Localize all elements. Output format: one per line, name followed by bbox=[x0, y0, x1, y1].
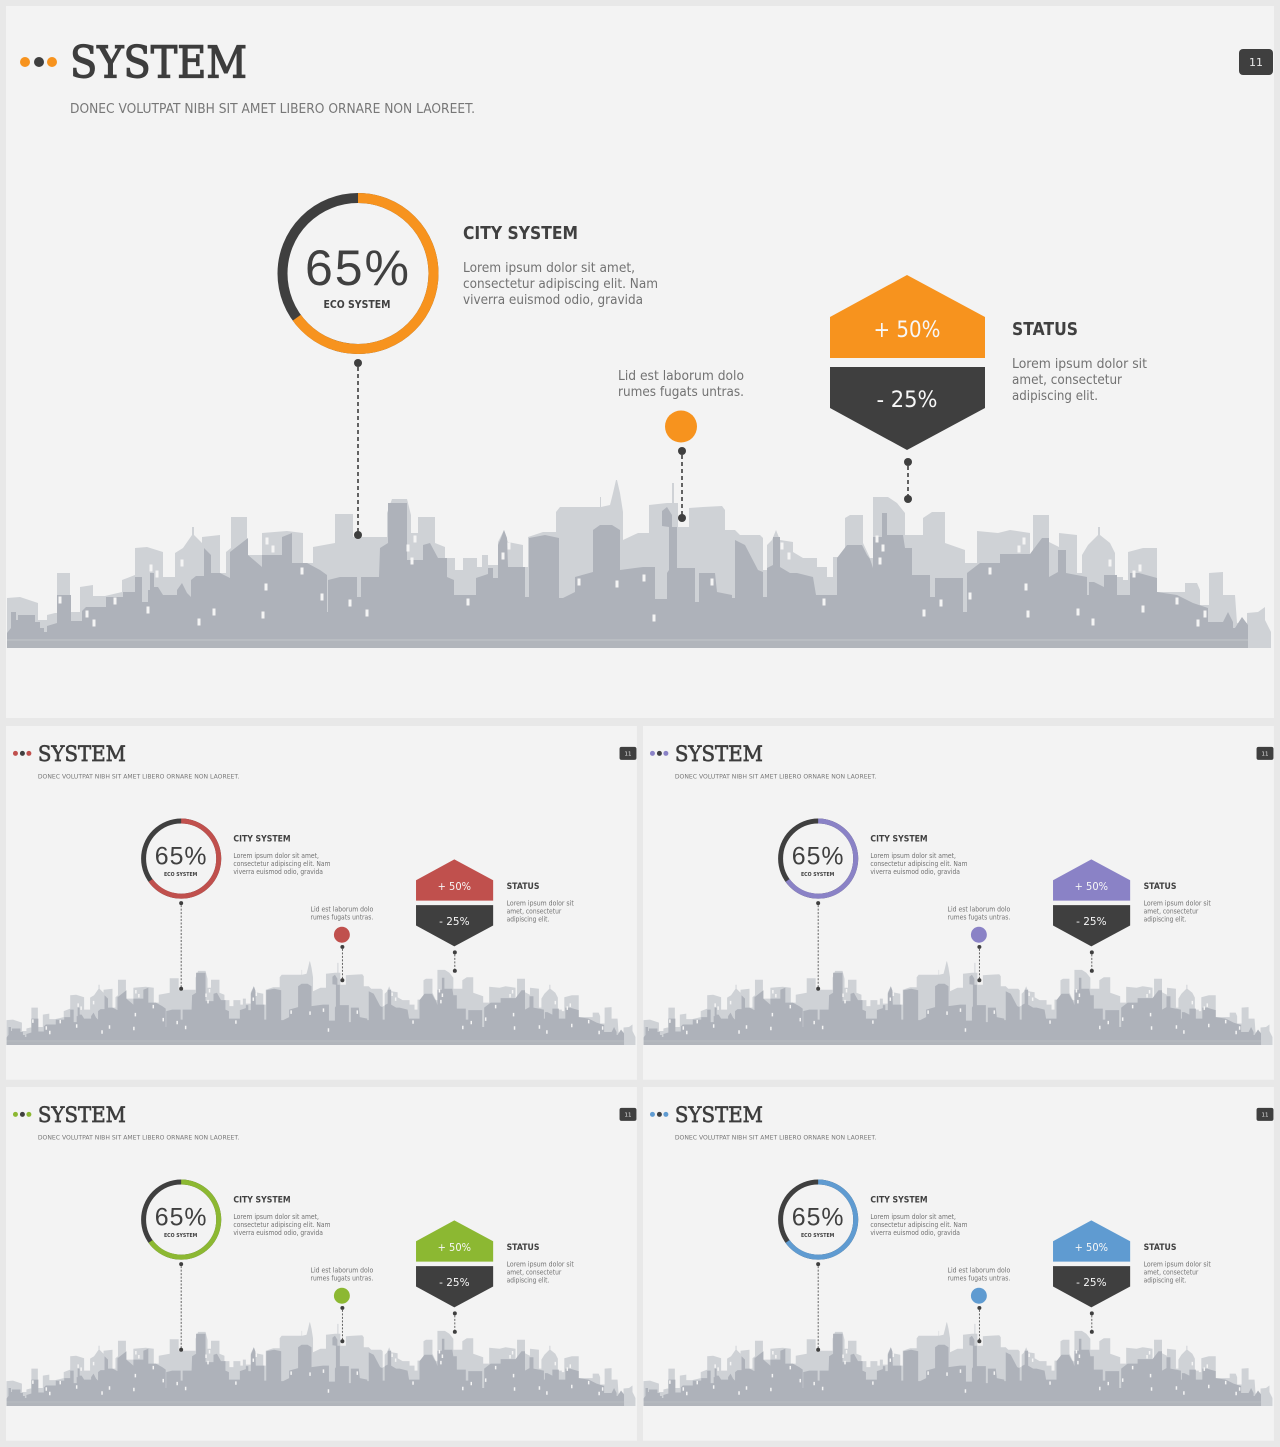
text block: city system: CITY SYSTEM bbox=[233, 834, 291, 844]
text block: status bbox=[1144, 1243, 1211, 1285]
subtitle: DONEC VOLUTPAT NIBH SIT AMET LIBERO ORNARE NON LAOREET. bbox=[675, 773, 876, 781]
page number badge bbox=[620, 747, 636, 760]
title: SYSTEM bbox=[38, 1103, 126, 1128]
subtitle: DONEC VOLUTPAT NIBH SIT AMET LIBERO ORNARE NON LAOREET. bbox=[675, 1134, 876, 1142]
text block: city system bbox=[870, 1195, 967, 1237]
donut chart: 65%: 65% bbox=[155, 842, 207, 870]
city skyline bbox=[643, 961, 1272, 1045]
hexagon: minus 25%: - 25% bbox=[1076, 1276, 1107, 1289]
donut chart: 65% bbox=[144, 821, 219, 896]
text block: callout: rumes fugats untras. bbox=[311, 914, 373, 922]
hexagon: minus 25% bbox=[416, 1266, 493, 1307]
donut chart: 65%: 65% bbox=[792, 842, 844, 870]
page number badge: 11 bbox=[1249, 56, 1263, 69]
connector: hexagon to skyline bbox=[453, 1311, 457, 1334]
icon: title dots bbox=[650, 751, 668, 756]
city skyline bbox=[7, 480, 1271, 648]
panel: large orange slide bbox=[6, 6, 1274, 718]
text block: status bbox=[1144, 882, 1211, 924]
text block: city system: viverra euismod odio, gravida bbox=[870, 1229, 960, 1237]
hexagon: plus 50%: + 50% bbox=[438, 1241, 471, 1254]
text block: status: amet, consectetur bbox=[507, 1269, 562, 1277]
text block: callout: rumes fugats untras. bbox=[618, 384, 744, 400]
icon: title dots bbox=[650, 1112, 668, 1117]
hexagon: minus 25%: - 25% bbox=[439, 1276, 470, 1289]
marker: callout circle with connector bbox=[334, 927, 350, 982]
text block: status: amet, consectetur bbox=[507, 908, 562, 916]
text block: city system: Lorem ipsum dolor sit amet, bbox=[870, 852, 956, 860]
connector: hexagon to skyline bbox=[1090, 950, 1094, 973]
text block: status: amet, consectetur bbox=[1144, 1269, 1199, 1277]
donut chart: 65%: 65% bbox=[792, 1203, 844, 1231]
title: SYSTEM bbox=[38, 742, 126, 767]
page number badge bbox=[1257, 747, 1273, 760]
city skyline bbox=[6, 961, 635, 1045]
text block: city system: Lorem ipsum dolor sit amet, bbox=[233, 1213, 319, 1221]
hexagon: minus 25% bbox=[1053, 1266, 1130, 1307]
page number badge: 11 bbox=[1262, 751, 1268, 757]
page number badge bbox=[1257, 1108, 1273, 1121]
text block: status: Lorem ipsum dolor sit bbox=[507, 900, 574, 908]
text block: city system: viverra euismod odio, gravida bbox=[463, 292, 643, 308]
connector: donut to skyline bbox=[179, 901, 183, 991]
page number badge bbox=[1239, 49, 1273, 75]
connector: donut to skyline bbox=[179, 1262, 183, 1352]
text block: callout: Lid est laborum dolo bbox=[618, 368, 744, 384]
hexagon: plus 50% bbox=[1053, 859, 1130, 901]
city skyline bbox=[6, 1322, 635, 1406]
connector: donut to skyline bbox=[354, 359, 362, 539]
text block: status: adipiscing elit. bbox=[1144, 916, 1186, 924]
text block: status: STATUS bbox=[1012, 319, 1078, 340]
marker: callout circle with connector bbox=[665, 410, 697, 522]
text block: city system: viverra euismod odio, gravida bbox=[870, 868, 960, 876]
hexagon: plus 50% bbox=[1053, 1220, 1130, 1262]
text block: callout bbox=[948, 1267, 1010, 1283]
text block: city system bbox=[463, 223, 658, 308]
connector: hexagon to skyline bbox=[1090, 1311, 1094, 1334]
subtitle: DONEC VOLUTPAT NIBH SIT AMET LIBERO ORNARE NON LAOREET. bbox=[38, 1134, 239, 1142]
donut chart: 65% bbox=[781, 821, 856, 896]
text block: city system: consectetur adipiscing elit. Nam bbox=[870, 860, 967, 868]
text block: callout: Lid est laborum dolo bbox=[948, 1267, 1010, 1275]
text block: city system: consectetur adipiscing elit. Nam bbox=[233, 1221, 330, 1229]
text block: status bbox=[507, 882, 574, 924]
hexagon: minus 25% bbox=[1053, 905, 1130, 946]
text block: status: Lorem ipsum dolor sit bbox=[1144, 900, 1211, 908]
hexagon: plus 50%: + 50% bbox=[874, 318, 940, 343]
text block: callout bbox=[311, 1267, 373, 1283]
text block: status: amet, consectetur bbox=[1144, 908, 1199, 916]
hexagon: minus 25% bbox=[830, 367, 985, 450]
donut chart: 65% bbox=[781, 1182, 856, 1257]
text block: status: STATUS bbox=[507, 882, 539, 892]
text block: city system: Lorem ipsum dolor sit amet, bbox=[870, 1213, 956, 1221]
icon: title dots bbox=[13, 1112, 31, 1117]
page number badge: 11 bbox=[625, 1112, 631, 1118]
text block: city system bbox=[870, 834, 967, 876]
text block: callout: Lid est laborum dolo bbox=[948, 906, 1010, 914]
panel: red slide bbox=[6, 726, 637, 1080]
text block: callout bbox=[311, 906, 373, 922]
text block: city system: CITY SYSTEM bbox=[870, 834, 928, 844]
text block: status: Lorem ipsum dolor sit bbox=[1144, 1261, 1211, 1269]
hexagon: plus 50% bbox=[416, 1220, 493, 1262]
page number badge bbox=[620, 1108, 636, 1121]
donut chart: 65%: 65% bbox=[155, 1203, 207, 1231]
text block: city system: consectetur adipiscing elit. Nam bbox=[463, 276, 658, 292]
title: SYSTEM bbox=[675, 742, 763, 767]
text block: city system: CITY SYSTEM bbox=[870, 1195, 928, 1205]
hexagon: minus 25%: - 25% bbox=[1076, 915, 1107, 928]
text block: callout bbox=[948, 906, 1010, 922]
hexagon: plus 50% bbox=[416, 859, 493, 901]
connector: donut to skyline bbox=[816, 901, 820, 991]
icon: title dots bbox=[13, 751, 31, 756]
text block: status: STATUS bbox=[1144, 882, 1176, 892]
donut chart: 65%: ECO SYSTEM bbox=[801, 1233, 834, 1239]
text block: status: STATUS bbox=[1144, 1243, 1176, 1253]
text block: city system: CITY SYSTEM bbox=[463, 223, 578, 244]
marker: callout circle with connector bbox=[971, 927, 987, 982]
marker: callout circle with connector bbox=[971, 1288, 987, 1343]
donut chart: 65%: ECO SYSTEM bbox=[164, 872, 197, 878]
text block: city system: consectetur adipiscing elit. Nam bbox=[870, 1221, 967, 1229]
hexagon: plus 50% bbox=[830, 275, 985, 358]
connector: hexagon to skyline bbox=[904, 458, 912, 503]
text block: city system bbox=[233, 1195, 330, 1237]
subtitle: DONEC VOLUTPAT NIBH SIT AMET LIBERO ORNARE NON LAOREET. bbox=[38, 773, 239, 781]
donut chart: 65%: ECO SYSTEM bbox=[801, 872, 834, 878]
panel: green slide bbox=[6, 1087, 637, 1441]
hexagon: minus 25%: - 25% bbox=[439, 915, 470, 928]
text block: callout: Lid est laborum dolo bbox=[311, 1267, 373, 1275]
donut chart: 65%: ECO SYSTEM bbox=[324, 299, 390, 311]
text block: city system: CITY SYSTEM bbox=[233, 1195, 291, 1205]
text block: status: adipiscing elit. bbox=[1144, 1277, 1186, 1285]
hexagon: plus 50%: + 50% bbox=[438, 880, 471, 893]
donut chart: 65%: ECO SYSTEM bbox=[164, 1233, 197, 1239]
text block: city system: viverra euismod odio, gravida bbox=[233, 868, 323, 876]
text block: callout: rumes fugats untras. bbox=[311, 1275, 373, 1283]
donut chart: 65%: 65% bbox=[305, 240, 409, 296]
text block: status: adipiscing elit. bbox=[507, 916, 549, 924]
text block: callout: rumes fugats untras. bbox=[948, 1275, 1010, 1283]
text block: status bbox=[1012, 319, 1147, 404]
text block: status: adipiscing elit. bbox=[507, 1277, 549, 1285]
page number badge: 11 bbox=[1262, 1112, 1268, 1118]
donut chart: 65% bbox=[282, 198, 434, 349]
subtitle: DONEC VOLUTPAT NIBH SIT AMET LIBERO ORNARE NON LAOREET. bbox=[70, 102, 475, 117]
text block: callout: Lid est laborum dolo bbox=[311, 906, 373, 914]
title: SYSTEM bbox=[675, 1103, 763, 1128]
text block: city system: Lorem ipsum dolor sit amet, bbox=[463, 260, 635, 276]
hexagon: plus 50%: + 50% bbox=[1075, 880, 1108, 893]
text block: city system: consectetur adipiscing elit. Nam bbox=[233, 860, 330, 868]
text block: callout: rumes fugats untras. bbox=[948, 914, 1010, 922]
panel: blue slide bbox=[643, 1087, 1274, 1441]
connector: donut to skyline bbox=[816, 1262, 820, 1352]
city skyline bbox=[643, 1322, 1272, 1406]
text block: status: amet, consectetur bbox=[1012, 372, 1122, 388]
hexagon: minus 25% bbox=[416, 905, 493, 946]
text block: city system: viverra euismod odio, gravida bbox=[233, 1229, 323, 1237]
marker: callout circle with connector bbox=[334, 1288, 350, 1343]
icon: title dots bbox=[20, 57, 57, 67]
connector: hexagon to skyline bbox=[453, 950, 457, 973]
text block: status: STATUS bbox=[507, 1243, 539, 1253]
text block: status: adipiscing elit. bbox=[1012, 388, 1098, 404]
hexagon: minus 25%: - 25% bbox=[876, 388, 938, 413]
text block: status: Lorem ipsum dolor sit bbox=[1012, 356, 1147, 372]
text block: status bbox=[507, 1243, 574, 1285]
text block: city system bbox=[233, 834, 330, 876]
donut chart: 65% bbox=[144, 1182, 219, 1257]
text block: status: Lorem ipsum dolor sit bbox=[507, 1261, 574, 1269]
text block: callout bbox=[618, 368, 744, 400]
panel: purple slide bbox=[643, 726, 1274, 1080]
hexagon: plus 50%: + 50% bbox=[1075, 1241, 1108, 1254]
text block: city system: Lorem ipsum dolor sit amet, bbox=[233, 852, 319, 860]
page number badge: 11 bbox=[625, 751, 631, 757]
title: SYSTEM bbox=[70, 38, 247, 88]
